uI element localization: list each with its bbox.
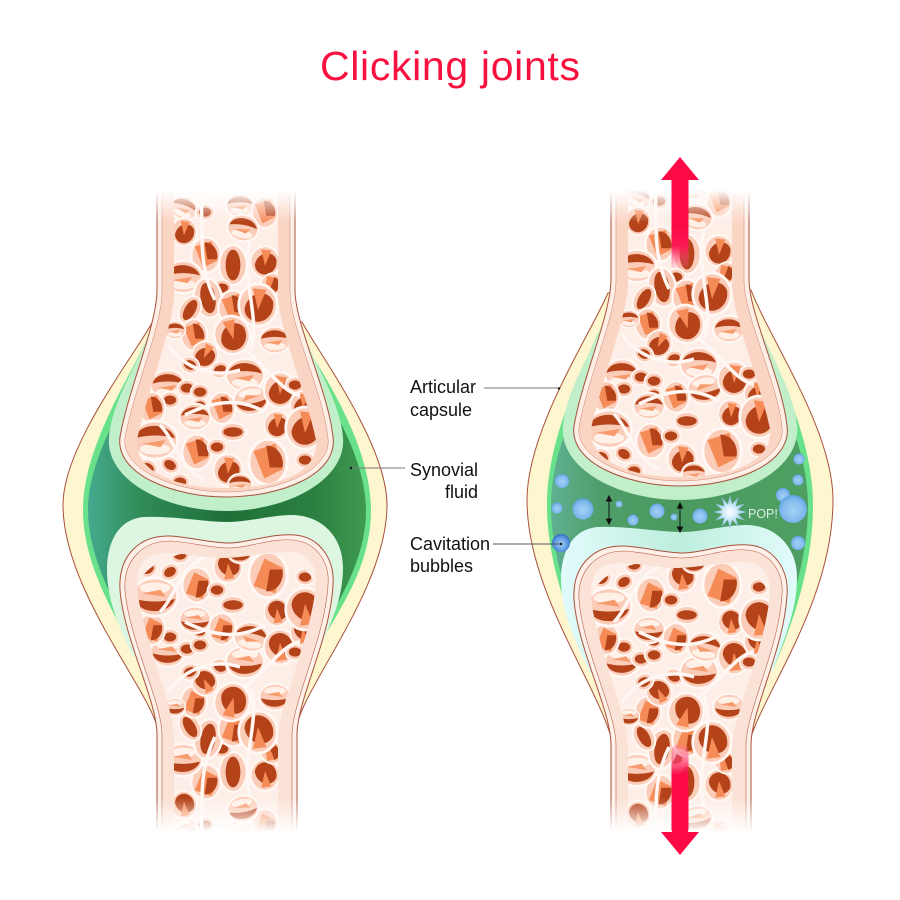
upper bone: [120, 160, 333, 497]
title: Clicking joints: [320, 43, 580, 89]
pop burst icon: [713, 495, 747, 529]
label: cavitation bubbles: [410, 534, 562, 576]
lower bone: [120, 535, 333, 877]
articular capsule: [527, 290, 833, 740]
cavitation bubbles: [552, 454, 807, 552]
label: articular capsule: capsule: [410, 400, 472, 420]
upper cartilage: [109, 330, 343, 511]
pop label: POP!: [748, 507, 778, 521]
synovial membrane: [547, 330, 813, 690]
lower cartilage: [561, 525, 797, 690]
label: cavitation bubbles: Cavitation: [410, 534, 490, 554]
gap arrow right: [678, 503, 682, 532]
label: articular capsule: Articular: [410, 377, 476, 397]
label: synovial fluid: [350, 460, 478, 502]
lower bone: [574, 545, 787, 887]
label: cavitation bubbles: bubbles: [410, 556, 473, 576]
panel: normal joint: [63, 160, 387, 877]
label: synovial fluid: Synovial: [410, 460, 478, 480]
upper cartilage: [563, 319, 797, 500]
upper bone: [574, 149, 787, 486]
lower cartilage: [107, 515, 343, 657]
arrow: pull up: [661, 157, 699, 268]
label: synovial fluid: fluid: [445, 482, 478, 502]
panel: stretched joint: [527, 149, 833, 887]
gap arrow left: [606, 496, 612, 524]
label: articular capsule: [410, 377, 560, 420]
synovial membrane: [83, 345, 371, 665]
arrow: pull down: [661, 745, 699, 855]
synovial fluid: [551, 345, 808, 660]
articular capsule: [63, 321, 387, 730]
synovial fluid: [88, 360, 366, 655]
